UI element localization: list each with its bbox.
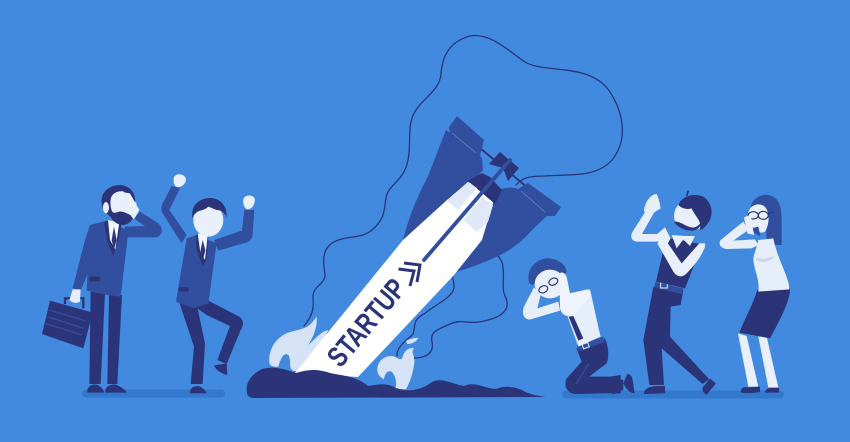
hair: [102, 185, 135, 217]
man with briefcase: [42, 185, 162, 393]
fin tip: left: [449, 116, 484, 156]
head face: [535, 270, 565, 298]
man with raised fists: [161, 174, 255, 393]
rocket hub: [489, 152, 519, 181]
panicking man: [631, 191, 716, 395]
shoes: [644, 386, 665, 394]
pocket: [89, 277, 100, 281]
hand: [69, 289, 81, 303]
left arm: [73, 225, 95, 291]
arm: near: [657, 237, 705, 276]
hand on face: [119, 192, 139, 219]
vest: [656, 238, 705, 288]
right arm: [214, 210, 254, 251]
jacket: [176, 235, 217, 308]
arm: right: [559, 273, 590, 316]
legs: [565, 338, 623, 394]
flame tip: [406, 338, 418, 344]
glasses: [538, 277, 559, 294]
rocket fin: left: [403, 130, 483, 240]
flame: right: [377, 348, 414, 389]
beard: [108, 210, 134, 225]
jacket: [87, 221, 128, 297]
fist left: [174, 174, 186, 187]
rocket band: [447, 182, 477, 210]
hair: [528, 258, 567, 285]
arm: left: [523, 287, 560, 319]
bent leg: [195, 301, 243, 364]
belt: [654, 282, 683, 294]
hair: [192, 198, 227, 218]
glasses: [748, 211, 773, 219]
standing leg: [179, 303, 205, 384]
tie: [569, 316, 583, 341]
back hair: [751, 195, 782, 245]
raised shoe: [214, 363, 227, 375]
hand: [744, 215, 754, 235]
torso: [560, 289, 601, 347]
rocket: [295, 116, 561, 377]
briefcase: [42, 298, 93, 348]
collar: [672, 235, 695, 248]
hand: raised: [644, 194, 661, 213]
rocket centre line: [424, 160, 510, 260]
legs: [89, 292, 122, 384]
belt: [577, 337, 605, 351]
chevrons: [398, 263, 420, 286]
shoes: [741, 387, 760, 393]
smoke trails: [304, 35, 622, 358]
ground shadow: left: [82, 390, 225, 398]
shirt and tie: [196, 234, 208, 266]
rocket nose: [468, 173, 502, 204]
face: [674, 205, 700, 230]
torso: [753, 238, 789, 292]
face: [110, 191, 137, 215]
fin seam: right: [521, 191, 545, 212]
left arm: [161, 186, 187, 243]
rocket fin: right: [447, 188, 549, 275]
rocket band: [463, 197, 493, 232]
bust shadow: [756, 256, 774, 262]
fin seam: left: [452, 133, 476, 153]
kneeling man: [523, 258, 635, 394]
collar and tie: [104, 221, 122, 256]
leg highlight: [576, 364, 589, 384]
arm: [720, 222, 758, 249]
pocket: [179, 287, 189, 292]
beard: [674, 222, 702, 231]
face: [193, 203, 223, 237]
legs: [643, 287, 709, 385]
raised arm: [125, 212, 162, 237]
hair: [678, 195, 712, 230]
ear: [103, 202, 109, 213]
flame: left: [269, 317, 328, 373]
fin tip: right: [516, 183, 561, 216]
legs: [738, 333, 778, 387]
arm: far: [631, 211, 667, 242]
shoes: [87, 385, 127, 393]
panicking woman: [720, 195, 790, 393]
hands clasped: [656, 227, 671, 245]
skirt: [739, 288, 790, 338]
shoe: [190, 386, 207, 393]
rocket label: STARTUP: [321, 273, 413, 373]
fist right: [243, 195, 255, 209]
mouth: [751, 227, 761, 237]
debris mound: [247, 368, 546, 398]
ground shadow: right: [562, 390, 784, 398]
far foot: [623, 374, 635, 393]
fin strut: [480, 148, 528, 188]
rocket body: [295, 182, 493, 377]
face: [748, 204, 769, 233]
